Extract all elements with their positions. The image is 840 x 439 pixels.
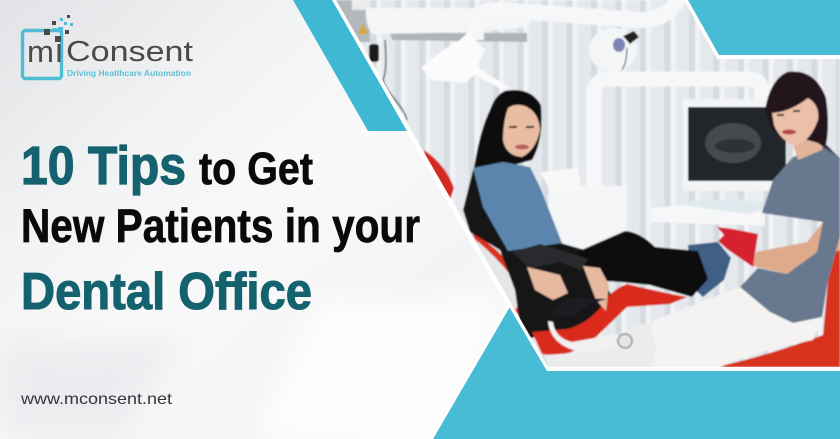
lamp arm tube — [476, 0, 680, 40]
chair headrest red — [424, 150, 454, 200]
logo tagline: Driving Healthcare Automation — [67, 68, 191, 78]
bottom teal block — [431, 305, 840, 439]
nurse chair — [720, 249, 840, 367]
upper left bracket and cable — [336, 0, 407, 120]
logo icon: pixels — [44, 15, 73, 42]
website url: www.mconsent.net — [20, 391, 173, 408]
title — [21, 136, 420, 321]
logo letter m: m — [27, 34, 54, 69]
logo letter i — [58, 44, 60, 62]
nurse forearm — [753, 222, 840, 274]
title line 1 — [21, 136, 313, 196]
patient sleeve — [512, 244, 588, 270]
left white panel — [0, 0, 511, 439]
wall blinds — [330, 0, 840, 367]
title line 1: 10 Tips — [21, 136, 186, 196]
nurse neck — [792, 139, 824, 161]
logo — [22, 15, 193, 78]
nurse scrubs — [740, 145, 840, 323]
top-right teal block — [684, 0, 840, 59]
chair back — [472, 232, 520, 316]
teal parallelogram accent — [293, 0, 407, 131]
desk and keyboard — [650, 199, 765, 226]
white pipe — [594, 79, 762, 190]
title line 1: to Get — [199, 143, 313, 194]
cabinet — [540, 168, 622, 251]
jeans — [688, 242, 731, 297]
patient legs — [577, 231, 708, 297]
patient bib — [473, 162, 562, 251]
photo: dental office scene — [330, 0, 840, 367]
logo icon: tablet — [22, 30, 62, 78]
nurse glove — [717, 227, 758, 267]
x-ray camera — [589, 28, 639, 72]
white arm frame — [548, 321, 632, 352]
chair seat — [532, 284, 687, 355]
nurse hair — [765, 72, 835, 155]
patient hands — [527, 266, 609, 311]
patient hair — [474, 90, 542, 168]
black armrest — [552, 298, 607, 316]
floor — [545, 324, 646, 367]
title line 3: Dental Office — [21, 263, 312, 321]
title line 2: New Patients in your — [21, 199, 420, 252]
monitor — [683, 99, 786, 202]
overhead lamp bar — [358, 8, 530, 42]
nurse face — [772, 98, 818, 146]
patient face — [503, 105, 540, 157]
logo wordmark: Consent — [66, 36, 193, 68]
patient torso — [463, 170, 612, 340]
lamp head — [421, 32, 510, 90]
nurse trousers — [650, 287, 822, 367]
